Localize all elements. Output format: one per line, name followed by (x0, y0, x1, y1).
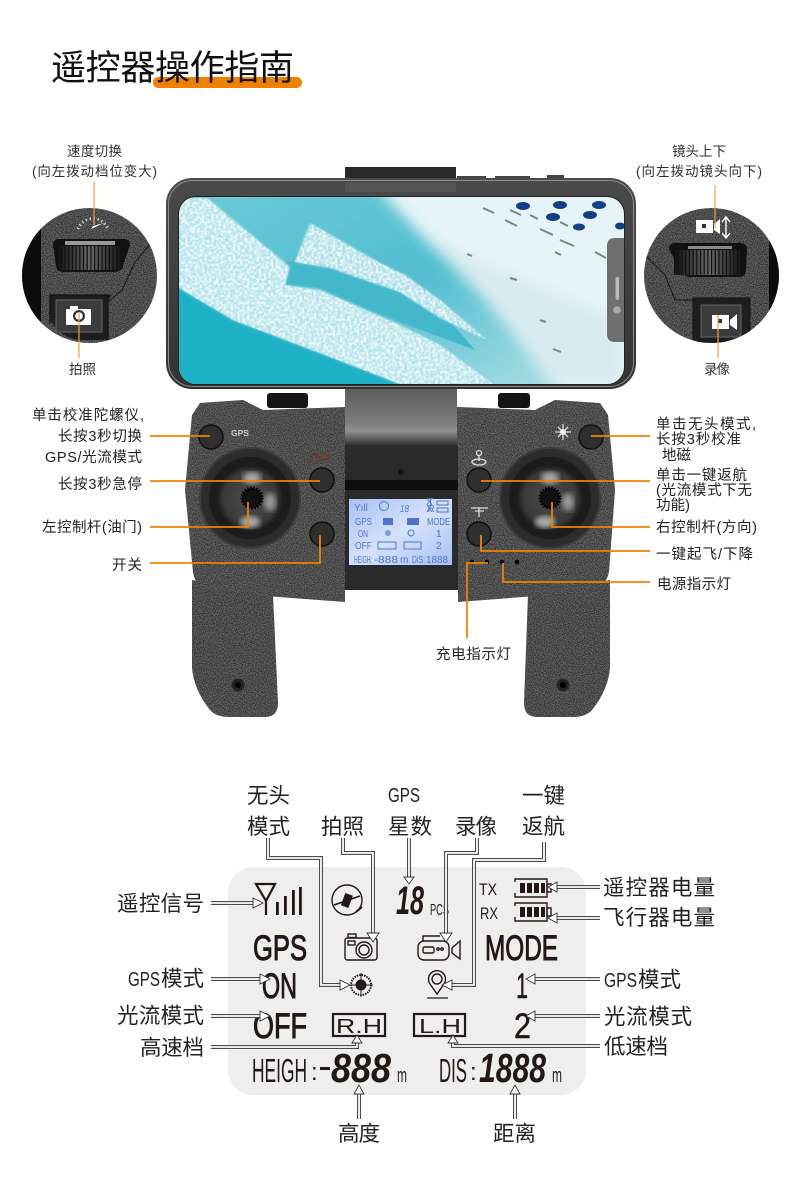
icon: home pin (427, 971, 448, 998)
icon: compass (349, 973, 373, 997)
callout lines and labels: controller: 开关 (112, 557, 142, 574)
phone top clamp (345, 167, 456, 192)
labels: lcd diagram: 一键 (522, 784, 565, 808)
callout lines and labels: controller: 单击一键返航 (656, 467, 748, 484)
callout lines and labels: controller: 地磁 (662, 447, 692, 464)
labels: lcd diagram: 遥控信号 (117, 892, 204, 916)
lcd diagram readouts: 2 (514, 1007, 531, 1046)
phone mount (345, 389, 457, 445)
buttons (199, 425, 603, 546)
lcd diagram readouts: PCS (430, 902, 449, 919)
labels: top callouts: (向左拨动档位变大) (32, 164, 157, 179)
labels: top callouts: 录像 (704, 362, 730, 377)
icon: camera (66, 306, 91, 325)
callout lines and labels: controller: (光流模式下无 (656, 482, 752, 499)
phone notch (607, 238, 624, 342)
phone with beach screen (160, 167, 636, 400)
lcd diagram readouts: ON (262, 967, 297, 1006)
lcd diagram readouts: DIS (439, 1052, 467, 1089)
controller body (185, 400, 615, 602)
callout lines and labels: controller: 电源指示灯 (657, 576, 731, 593)
small lcd screen: Yıll (354, 503, 368, 514)
labels: lcd diagram: 飞行器电量 (603, 906, 715, 930)
icon: satellite (332, 885, 362, 915)
icon: signal (256, 884, 302, 915)
small lcd screen: 1888 (426, 555, 448, 566)
labels: lcd diagram: 高度 (338, 1122, 380, 1146)
labels: lcd diagram: 模式 (161, 967, 204, 991)
small lcd screen: -888 (374, 555, 399, 566)
small lcd screen: OFF (355, 541, 372, 552)
callout lines and labels: controller: 左控制杆(油门) (42, 519, 142, 536)
labels: lcd diagram (117, 784, 715, 1146)
labels: top callouts (32, 144, 762, 377)
callout lines and labels: controller: 长按3秒急停 (58, 476, 142, 493)
small lcd screen: DIS: (412, 555, 425, 566)
icon: lens tilt (696, 217, 730, 238)
labels: lcd diagram: 拍照 (321, 815, 364, 839)
lcd diagram readouts: MODE (485, 929, 558, 968)
labels: lcd diagram: GPS (388, 785, 420, 807)
arrows: lcd callouts (211, 838, 600, 1119)
remote controller: GPS (231, 428, 249, 438)
L.H badge (414, 1014, 465, 1038)
small lcd screen: 1 (436, 529, 442, 540)
small lcd screen (349, 497, 452, 566)
labels: lcd diagram: 录像 (455, 815, 497, 839)
small lcd screen: RX (426, 504, 435, 515)
icon: video camera (418, 936, 460, 960)
small lcd screen: ON (358, 529, 368, 540)
labels: lcd diagram: 低速档 (604, 1035, 668, 1059)
labels: lcd diagram: 模式 (247, 815, 290, 839)
lcd diagram readouts: : (311, 1059, 318, 1086)
title underline (153, 77, 302, 88)
labels: lcd diagram: 高速档 (140, 1036, 204, 1060)
labels: top callouts: 拍照 (69, 362, 96, 377)
callout lines and labels: controller: 长按3秒切换 (58, 428, 142, 445)
labels: top callouts: (向左拨动镜头向下) (636, 164, 762, 179)
icon: rx battery (515, 903, 551, 921)
callout lines and labels: controller: 右控制杆(方向) (656, 519, 757, 536)
lcd diagram readouts: 1888 (479, 1045, 546, 1091)
labels: top callouts: 速度切换 (67, 144, 122, 159)
labels: lcd diagram: 遥控器电量 (603, 876, 715, 900)
labels: top callouts: 镜头上下 (672, 144, 726, 159)
lcd diagram readouts: m (552, 1065, 562, 1087)
lcd diagram readouts: 18 (396, 879, 424, 923)
lcd diagram readouts: RX (480, 904, 498, 923)
lcd diagram readouts: 888 (331, 1045, 391, 1091)
panel: lcd diagram background (228, 867, 586, 1095)
small lcd screen: GPS (355, 517, 372, 528)
callout lines and labels: controller: 单击校准陀螺仪, (32, 407, 144, 424)
lcd diagram readouts (252, 879, 562, 1091)
L.H badge: L.H (419, 1016, 461, 1038)
labels: lcd diagram: GPS (128, 969, 160, 991)
callout lines and labels: controller: 充电指示灯 (436, 646, 511, 663)
remote controller (185, 389, 615, 717)
icon: speed gauge (78, 219, 108, 229)
R.H badge (333, 1014, 385, 1038)
labels: lcd diagram: 返航 (522, 815, 565, 839)
small lcd screen: HEIGH: (354, 555, 372, 566)
detail circle: speed switch and photo button (20, 205, 158, 345)
callout lines and labels: controller: GPS/光流模式 (45, 449, 142, 466)
small lcd screen: MODE (427, 517, 450, 528)
lcd diagram readouts: HEIGH (252, 1052, 307, 1089)
callout lines and labels: controller: 单击无头模式, (656, 416, 756, 433)
small lcd screen: 18 (400, 504, 409, 515)
labels: lcd diagram: 星数 (388, 815, 432, 839)
callout lines and labels: controller: 功能) (656, 497, 690, 514)
small lcd screen: m (400, 555, 408, 566)
title: 遥控器操作指南 (51, 49, 294, 88)
detail circle: lens tilt and video button (644, 208, 783, 343)
icon: video (712, 314, 737, 330)
labels: lcd diagram: 模式 (638, 968, 681, 992)
labels: lcd diagram: 光流模式 (604, 1005, 692, 1029)
icon: tx battery (515, 879, 551, 897)
lcd diagram readouts: m (397, 1065, 407, 1087)
callout lines and labels: controller: 一键起飞/下降 (656, 546, 753, 563)
right grip (524, 580, 610, 717)
labels: lcd diagram: 光流模式 (117, 1004, 204, 1028)
callout lines and labels: controller (32, 407, 757, 663)
labels: lcd diagram: GPS (604, 970, 637, 992)
callout lines and labels: controller: 长按3秒校准 (656, 431, 741, 448)
labels: lcd diagram: 无头 (247, 784, 290, 808)
R.H badge: R.H (336, 1016, 382, 1038)
left joystick (200, 448, 300, 548)
small lcd screen: TX (426, 497, 434, 508)
icon: return home (472, 450, 486, 465)
indicator lights (470, 560, 519, 564)
lcd diagram readouts: OFF (253, 1007, 307, 1046)
right joystick (500, 448, 600, 548)
lcd diagram readouts: 1 (516, 967, 528, 1006)
labels: lcd diagram: 距离 (493, 1122, 536, 1146)
left grip (192, 580, 278, 717)
icon: take off (471, 508, 488, 517)
small lcd screen: 2 (436, 541, 442, 552)
remote controller: STOP (309, 454, 331, 463)
icon: camera (345, 934, 377, 960)
lcd diagram readouts: GPS (253, 929, 307, 968)
icon: headless compass (555, 424, 571, 440)
lcd diagram readouts: TX (479, 880, 497, 899)
lcd diagram readouts: : (470, 1059, 477, 1086)
